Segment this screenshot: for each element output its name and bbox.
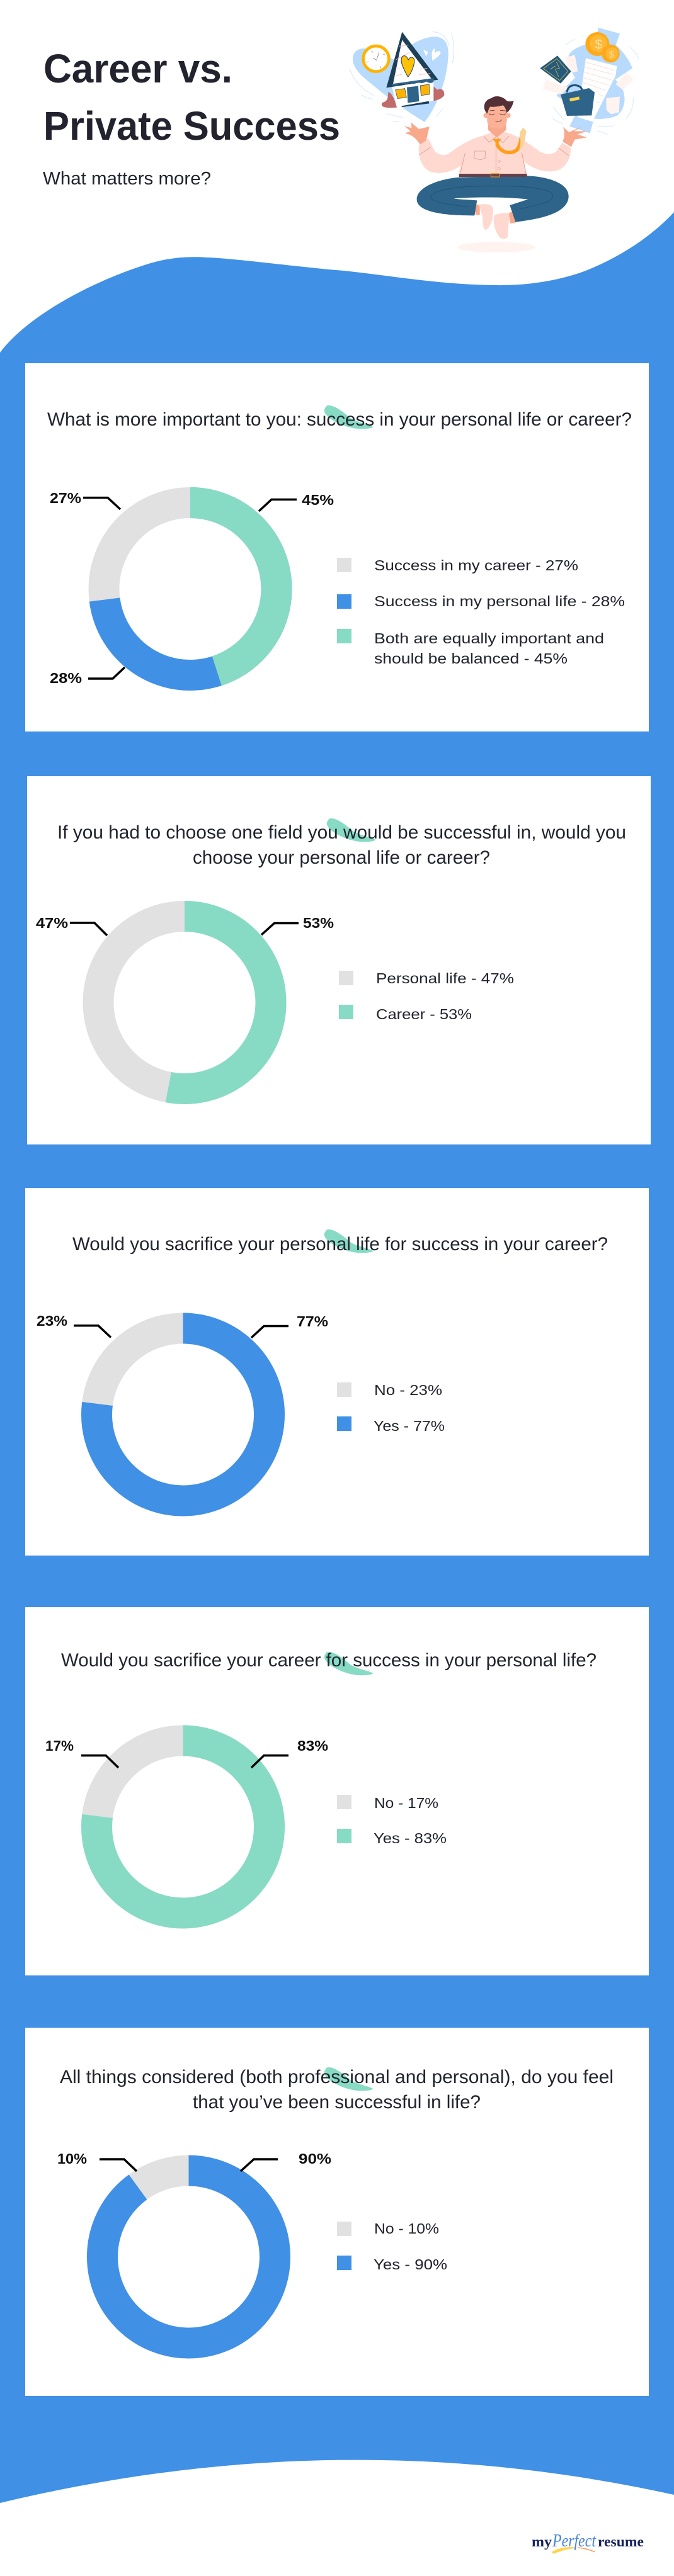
callout: 83% (251, 1737, 328, 1768)
callout: 27%: 27% (50, 490, 81, 506)
callout: 45%: 45% (302, 492, 334, 508)
callout: 47% (36, 915, 107, 935)
accent blob (324, 1652, 373, 1675)
question heading: All things considered (both professional and personal), do you feel (60, 2067, 614, 2087)
question heading: that you’ve been successful in life? (193, 2092, 481, 2113)
callout: 17%: 17% (45, 1737, 74, 1754)
icon: career items, coins, papers and briefcase (540, 28, 639, 134)
legend: Both are equally important and (374, 630, 604, 647)
callout: 28% (50, 667, 125, 686)
logo: myPerfectResume: my (532, 2534, 552, 2550)
callout: 27% (50, 490, 120, 509)
legend: Yes - 77% (374, 1418, 445, 1434)
callout: 17% (45, 1737, 118, 1768)
logo: myPerfectResume (532, 2531, 644, 2553)
accent blob (327, 818, 375, 842)
icon: home heart with clock (350, 32, 454, 122)
question heading (57, 822, 626, 868)
callout: 23%: 23% (37, 1313, 67, 1329)
legend (337, 1795, 447, 1846)
callout: 10% (57, 2150, 137, 2171)
accent blob (324, 405, 373, 429)
panel: personal life or career (25, 363, 649, 732)
logo: myPerfectResume: resume (598, 2534, 644, 2550)
donut chart (97, 1741, 270, 1913)
donut chart (98, 917, 271, 1089)
legend (337, 557, 625, 667)
panel: choose one field (27, 776, 651, 1144)
legend: should be balanced - 45% (374, 650, 568, 667)
panel: sacrifice career (25, 1607, 649, 1975)
callout: 45% (259, 492, 334, 511)
question heading: Would you sacrifice your career for success in your personal life? (61, 1650, 597, 1671)
question heading: If you had to choose one field you would be successful in, would you (57, 822, 626, 843)
callout: 23% (37, 1313, 111, 1337)
question heading: What is more important to you: success in your personal life or career? (47, 409, 632, 430)
callout: 83%: 83% (297, 1737, 328, 1754)
legend: No - 10% (374, 2220, 439, 2237)
legend: Success in my personal life - 28% (374, 593, 625, 609)
callout: 53%: 53% (303, 915, 334, 931)
question heading: Would you sacrifice your personal life for success in your career? (72, 1234, 608, 1255)
icon: career items, coins, papers and briefcase: $ (595, 37, 602, 52)
legend (337, 2220, 447, 2273)
callout: 47%: 47% (36, 915, 68, 931)
panel: sacrifice personal life (25, 1188, 649, 1556)
accent blob (324, 1229, 373, 1253)
donut chart (97, 1328, 270, 1501)
question heading: choose your personal life or career? (193, 847, 490, 868)
legend: No - 17% (374, 1795, 438, 1811)
panel: successful in life (25, 2028, 649, 2396)
title (43, 46, 340, 149)
question heading (60, 2067, 614, 2113)
illustration: meditating man juggling home and career (350, 28, 639, 252)
callout: 77% (251, 1313, 328, 1338)
legend: Personal life - 47% (376, 970, 514, 986)
donut chart (102, 2171, 275, 2343)
legend (337, 1382, 445, 1434)
legend: Yes - 90% (374, 2256, 447, 2273)
callout: 28%: 28% (50, 670, 82, 686)
title: Career vs. (43, 46, 232, 91)
logo: myPerfectResume: Perfect (552, 2531, 597, 2551)
legend: Yes - 83% (374, 1830, 447, 1846)
callout: 10%: 10% (57, 2150, 87, 2167)
accent blob (324, 2067, 373, 2091)
icon: man in lotus pose (404, 96, 588, 252)
legend: Career - 53% (376, 1006, 472, 1022)
callout: 90% (241, 2150, 331, 2171)
donut chart (104, 502, 277, 675)
callout: 77%: 77% (297, 1313, 328, 1330)
legend (339, 970, 514, 1022)
title: Private Success (43, 103, 340, 149)
subtitle: What matters more? (43, 169, 211, 189)
legend: Success in my career - 27% (374, 557, 578, 573)
legend: No - 23% (374, 1382, 442, 1398)
callout: 90%: 90% (299, 2150, 331, 2167)
icon: career items, coins, papers and briefcase: $ (609, 50, 614, 60)
callout: 53% (261, 915, 334, 935)
